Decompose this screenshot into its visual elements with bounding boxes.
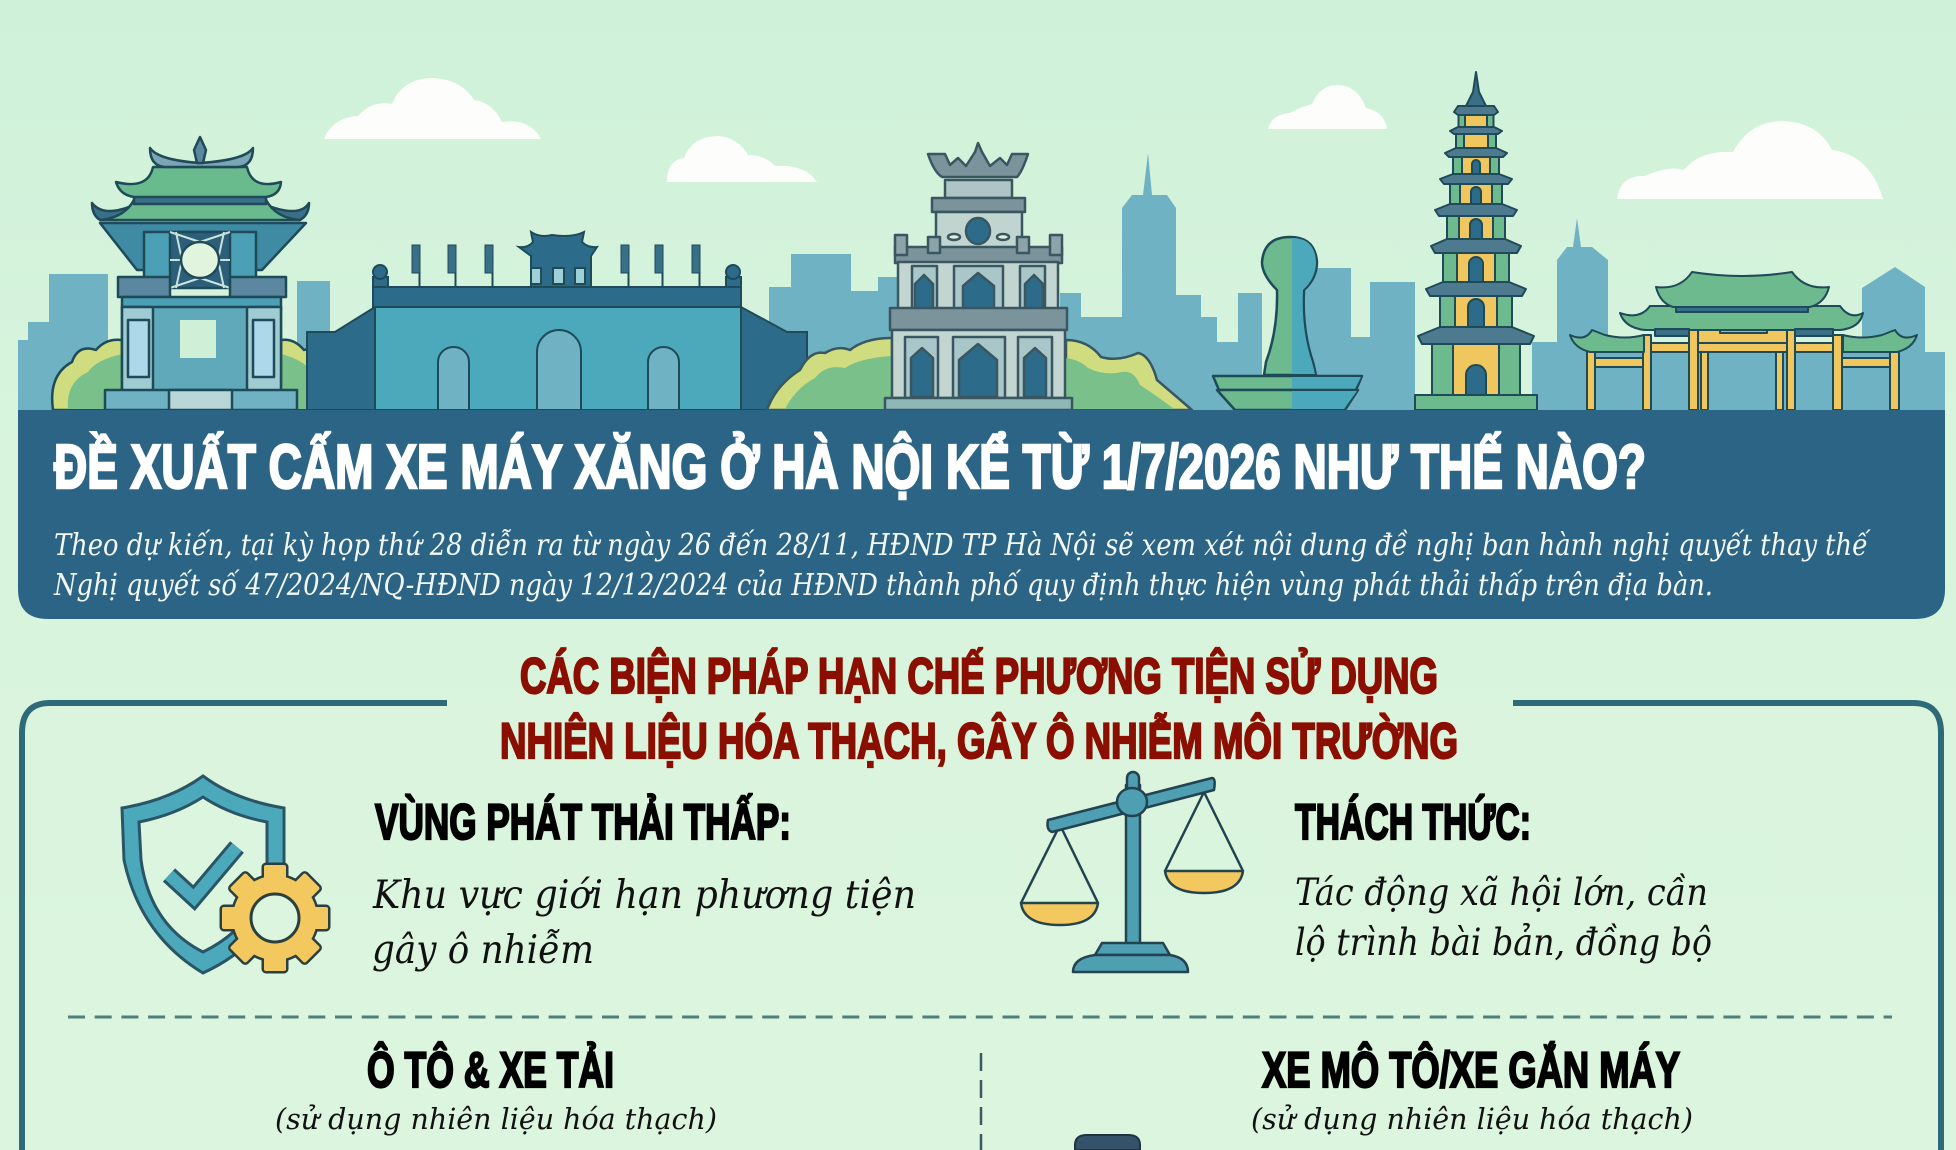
challenge text: THÁCH THỨC: [1295,794,1531,850]
intro text [53,528,1871,603]
low emission zone text: gây ô nhiễm [372,928,594,973]
low emission zone text [372,794,916,973]
column heading: motorcycles: (sử dụng nhiên liệu hóa thạch) [1251,1102,1693,1136]
challenge text [1295,794,1712,964]
landmark: monument and basin [1213,237,1362,410]
challenge text: Tác động xã hội lớn, cần [1295,871,1708,914]
column heading: motorcycles: XE MÔ TÔ/XE GẮN MÁY [1262,1041,1680,1098]
section heading [500,647,1458,769]
header banner [18,410,1945,619]
landmark: Khue Van Cac pavilion [52,137,348,410]
background city buildings [18,153,1945,410]
section heading: CÁC BIỆN PHÁP HẠN CHẾ PHƯƠNG TIỆN SỬ DỤNG [520,647,1438,704]
landmark: Doan Mon citadel gate [307,232,807,410]
icon: balance scale [1021,772,1243,972]
section heading: NHIÊN LIỆU HÓA THẠCH, GÂY Ô NHIỄM MÔI TRƯỜNG [500,712,1458,769]
column heading: motorcycles [1251,1041,1693,1136]
landmark: Turtle Tower with bushes [767,143,1192,410]
challenge text: lộ trình bài bản, đồng bộ [1295,921,1712,964]
intro text: Nghị quyết số 47/2024/NQ-HĐND ngày 12/12/2024 của HĐND thành phố quy định thực hiện vùng phát thải thấp trên địa bàn. [53,568,1713,603]
clouds [324,78,1883,199]
column heading: cars and trucks [275,1041,717,1136]
low emission zone text: VÙNG PHÁT THẢI THẤP: [375,794,791,850]
column heading: cars and trucks: (sử dụng nhiên liệu hóa thạch) [275,1102,717,1136]
section frame [22,703,1941,1150]
low emission zone text: Khu vực giới hạn phương tiện [372,873,916,918]
icon: partial motorcycle top [1075,1135,1140,1150]
landmark: Tran Quoc pagoda [1415,72,1537,410]
column heading: cars and trucks: Ô TÔ & XE TẢI [367,1041,614,1098]
icon: shield with gear [122,776,328,973]
landmark: traditional gate [1570,272,1917,410]
skyline illustration [18,72,1945,410]
